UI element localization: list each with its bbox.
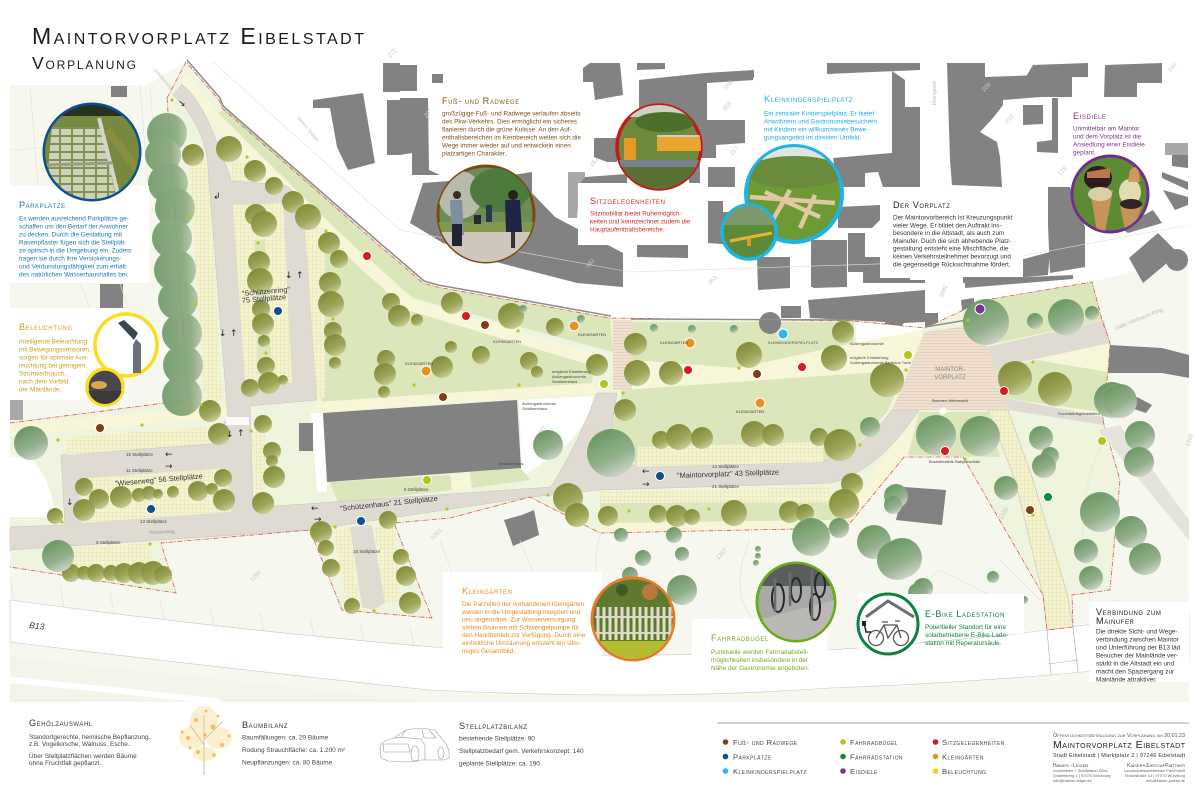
parcel numbers: 1290 [249, 569, 263, 583]
text block: stehen Brunnen mit Schwengelpumpe für [462, 624, 580, 631]
icon: bench photo [617, 105, 701, 192]
parking labels and arrows: ↑ [237, 429, 245, 439]
parking labels and arrows: → [642, 480, 650, 490]
parcel numbers: 356 [723, 80, 735, 91]
icon: ice cream photo [1072, 156, 1148, 235]
parcel numbers: 165 [1167, 62, 1179, 73]
heading: Kleingärten [462, 586, 512, 596]
parking labels and arrows: KLEINGÄRTEN [405, 361, 433, 366]
legend: Beleuchtung [942, 767, 986, 776]
text block: keinen Verkehrsteilnehmer bevorzugt und [893, 254, 1011, 260]
text block: Sitzmobiliar bietet Ruhemöglich- [590, 210, 682, 218]
text block: geplant. [1073, 150, 1096, 156]
heading: Mainufer [1096, 616, 1135, 626]
parking labels and arrows: 21 Stellplätze [712, 484, 740, 489]
parking labels and arrows: MAINTOR- [935, 367, 965, 373]
text block: Der Maintorvorbereich ist Kreuzungspunkt [893, 214, 1013, 222]
parcel numbers: 362 [585, 258, 597, 269]
text block: schaffen um den Bedarf der Anwohner [19, 224, 129, 230]
heading: Kleinkinderspielplatz [764, 94, 853, 104]
heading: Gehölzauswahl [29, 718, 93, 728]
parcel numbers: 1288 [1185, 432, 1196, 448]
parking labels and arrows: "Schützenring" [241, 285, 291, 298]
heading: Der Vorplatz [893, 200, 950, 210]
text block: flanieren durch die grüne Kulisse. An den Auf- [442, 126, 572, 134]
heading: Eisdiele [1073, 111, 1107, 121]
location dots [96, 252, 1106, 526]
text block: Mainlände attraktiver. [1096, 676, 1157, 684]
panel: Stellplatzbilanz [459, 721, 584, 768]
text block: Es werden ausreichend Parkplätze ge- [19, 216, 129, 222]
legend: Fahrradbügel [850, 738, 898, 747]
text block: solarbetriebene E-Bike-Lade- [925, 632, 1008, 639]
icon: car outline [380, 728, 449, 762]
text block: ze optisch in die Umgebung ein. Zudem [19, 248, 132, 254]
pink plaza [892, 323, 1008, 410]
text block: Stromverbrauch, [19, 370, 66, 378]
title block: Öffentlichkeitsbeteiligung zur Vorplanung am 20.01.23 [1053, 732, 1185, 739]
parking labels and arrows: 75 Stellplätze [241, 292, 286, 305]
legend: Kleingärten [942, 752, 984, 762]
parcel numbers: 210 [1004, 114, 1016, 125]
parking labels and arrows: KLEINGÄRTEN [736, 409, 764, 414]
text block: Anwohnern und Gastronomiebesuchern [764, 118, 877, 126]
parcel numbers: 1291 [430, 527, 444, 541]
parking labels and arrows: 13 Stellplätze [140, 519, 168, 524]
heading: Parkplätze [19, 200, 66, 210]
legend: Sitzgelegenheiten [942, 738, 1005, 747]
icon: e-bike charging [858, 594, 918, 654]
text block: neu angeordnet. Zur Wasserversorgung [462, 617, 576, 624]
road label B13: B13 [29, 620, 45, 632]
parcel numbers: 1287 [715, 547, 729, 561]
lawns [212, 108, 1108, 523]
building footprints [10, 63, 1189, 420]
heading: Fuß- und Radwege [442, 96, 520, 106]
text block: gestaltung entsteht eine Mischfläche, die [893, 246, 1009, 253]
text block: Potentieller Standort für eine [925, 624, 1006, 631]
parking labels and arrows: 14 Stellplätze [712, 464, 740, 469]
panel: Gehölzauswahl [29, 718, 151, 767]
text block: des natürlichen Wasserhaushaltes bei. [19, 272, 129, 278]
parking labels and arrows: 15 Stellplätze [353, 549, 381, 554]
parking labels and arrows: ↓ [219, 329, 227, 339]
heading: Stellplatzbilanz [459, 721, 528, 731]
icon: lamp at night photo [87, 369, 123, 405]
parcel numbers: Gebr.-Hofmann-Ring [1115, 307, 1164, 332]
parking labels and arrows: ← [165, 450, 173, 460]
parcel numbers: 209 [981, 82, 993, 93]
parcel numbers: Maingasse [932, 81, 938, 105]
text block: Wege immer wieder auf und entwickeln einen [442, 142, 571, 150]
text block: tragen sie durch ihre Versickerungs- [19, 256, 121, 262]
text block: Die Parzellen der vorhandenen Kleingärten [462, 601, 585, 608]
trees [14, 113, 1161, 614]
parking labels and arrows: ↓ [285, 271, 293, 281]
panel: Der Vorplatz [881, 188, 1023, 277]
icon: seesaw photo [722, 205, 776, 259]
white plots [10, 322, 923, 517]
text block: stärkt in die Altstadt ein und [1096, 660, 1175, 668]
text block: Neupflanzungen: ca. 80 Bäume [242, 760, 333, 766]
surrounding ground [10, 62, 1189, 702]
parking labels and arrows: Bushaltestelle Babyfahrräder [929, 459, 981, 464]
text block: Rodung Strauchfläche: ca. 1.200 m² [242, 747, 346, 754]
title: Maintorvorplatz Eibelstadt [32, 23, 364, 49]
parcel numbers: 297 [423, 108, 435, 119]
heading: Baumbilanz [242, 720, 288, 730]
parcel numbers: 272 [387, 48, 399, 59]
icon: bicycle stands photo [757, 563, 835, 641]
parcel numbers: Unterer Graben [296, 115, 320, 143]
parking labels and arrows: Außengastronomie [850, 341, 885, 346]
text block: Punktuelle werden Fahrradabstell- [711, 649, 808, 656]
parking labels and arrows: ↘ [178, 99, 186, 109]
parcel numbers: 1290/2 [534, 425, 548, 444]
title block: info@haines-leiger.de [1053, 778, 1093, 783]
text block: möglichkeiten insbesondere in der [711, 657, 809, 664]
text block: vieler Wege. Er bildet den Auftrakt ins- [893, 222, 1002, 229]
heading: Fahrradbügel [711, 633, 769, 643]
parcel numbers: Schützenring [152, 67, 174, 91]
small lamp markers [56, 98, 1035, 613]
text block: Hauptaufenthaltsbereiche. [590, 226, 665, 234]
parking labels and arrows: KLEINGÄRTEN [493, 339, 521, 344]
title block: Textorstraße 14 | 97070 Würzburg [1124, 773, 1185, 778]
icon: garden fence photo [590, 578, 676, 661]
title block: Haines - Leiger [1053, 763, 1088, 769]
parking labels and arrows: ← [311, 504, 319, 514]
title block: Maintorvorplatz Eibelstadt [1053, 739, 1186, 751]
icon: cyclists photo [436, 166, 536, 265]
parking labels and arrows: KLEINGÄRTEN [660, 340, 688, 345]
parking labels and arrows: Durchfahrtsgrünstreifen [1058, 411, 1100, 416]
parking labels and arrows: KLEINGÄRTEN [578, 332, 606, 337]
text block: enthaltsbereichen im Kernbereich weiten sich die [442, 134, 581, 142]
panel: Kleinkinderspielplatz [722, 78, 892, 259]
text block: Ansiedlung einer Eisdiele [1073, 142, 1145, 148]
parking labels and arrows: 11 Stellplätze [126, 468, 153, 473]
text block: Besucher der Mainlände ver- [1096, 652, 1178, 660]
B13 road band [10, 600, 1189, 695]
parking labels and arrows: → [314, 515, 322, 525]
icon: paving photo [44, 104, 140, 207]
text block: Die direkte Sicht- und Wege- [1096, 628, 1178, 636]
text block: leuchtung bei geringem [19, 362, 85, 370]
parking labels and arrows [66, 99, 1100, 554]
legend [723, 738, 1005, 776]
text block: Mainufer. Duch die sich abhebende Platz- [893, 238, 1011, 245]
text block: mit Kindern ein willkommenes Bewe- [764, 126, 868, 134]
parking labels and arrows: Außengastronomie [522, 401, 557, 406]
heading: Sitzgelegenheiten [590, 196, 666, 206]
title block: Stadt Eibelstadt | Marktplatz 2 | 97246 Eibelstadt [1053, 753, 1185, 759]
parking labels and arrows: Schützenhaus [522, 406, 547, 411]
panel: Fuß- und Radwege [430, 85, 590, 265]
title block: Grabenberg 1 | 97070 Würzburg [1053, 773, 1111, 778]
cream footpaths [10, 73, 1110, 533]
parking labels and arrows: Außengastronomie Bierhaus Turla [850, 360, 911, 365]
heading: Beleuchtung [19, 322, 73, 332]
bottom white strip [0, 702, 1199, 800]
legend: Kleinkinderspielplatz [733, 767, 807, 776]
text block: Nähe der Gastronomie angeboten. [711, 665, 810, 672]
text block: keiten und kennzeichnet zudem die [590, 218, 691, 226]
parking labels and arrows: mögliche Erweiterung [850, 355, 888, 360]
parcel numbers: 1285 [999, 506, 1011, 521]
text block: miges Gesamtbild. [462, 648, 515, 655]
legend: Fahrradstation [850, 752, 903, 762]
parking labels and arrows: Außengastronomie [552, 374, 587, 379]
text block: und dem Vorplatz ist die [1073, 134, 1142, 140]
parcel numbers: 357 [729, 146, 741, 157]
text block: zu decken. Durch die Gestaltung mit [19, 232, 122, 238]
text block: z.B. Vogelkirsche, Walnuss, Esche.. [29, 741, 132, 748]
heading: Verbindung zum [1096, 607, 1161, 617]
parking labels and arrows: mögliche Erweiterung [552, 369, 590, 374]
site area [10, 62, 1120, 630]
legend: Fuß- und Radwege [733, 738, 798, 747]
text block: der Mainlände. [19, 386, 62, 394]
title block [1053, 732, 1186, 783]
text block: geplante Stellplätze: ca. 190 [459, 760, 540, 768]
parking labels and arrows: ↑ [230, 329, 238, 339]
south footpath [988, 410, 1073, 630]
parking labels and arrows: ↓ [66, 498, 74, 508]
paved parking [65, 158, 831, 603]
title block: info@kaiser-juritza.de [1146, 778, 1186, 783]
text block: und Unterführung der B13 läd [1096, 644, 1181, 652]
parking labels and arrows: VORPLATZ [934, 375, 966, 381]
text block: Intelligente Beleuchtung [19, 338, 88, 346]
panel: Eisdiele [1070, 97, 1150, 234]
text block: Standortgerechte, heimische Bepflanzung. [29, 734, 151, 741]
text block: des Pkw-Verkehrs. Dies ermöglicht ein sicheres [442, 118, 577, 126]
parking labels and arrows: 15 Stellplätze [126, 452, 154, 457]
heading: E-Bike Ladestation [925, 609, 1005, 619]
parking labels and arrows: Brunnen-Wehrmarkt [932, 398, 969, 403]
site boundary [10, 62, 1120, 630]
parking labels and arrows: "Maintorvorplatz" 43 Stellplätze [677, 467, 779, 480]
text block: Über Stellplatzflächen werden Bäume [29, 752, 137, 760]
text block: und Verdunstungsfähigkeit zum erhalt [19, 264, 126, 270]
text block: besondere in die Altstadt, als auch zum [893, 230, 1004, 237]
text block: platzartigen Charakter. [442, 150, 507, 158]
parcel numbers: 263 [589, 157, 601, 168]
parking labels and arrows: "Wieserweg" 56 Stellplätze [114, 471, 203, 488]
parking labels and arrows: ← [642, 467, 650, 477]
text block: Unmittelbar am Maintor [1073, 126, 1140, 132]
panel: Verbindung zum Mainufer [1089, 602, 1189, 684]
panel: Baumbilanz [242, 720, 346, 766]
text block: großzügige Fuß- und Radwege verlaufen abseits [442, 110, 581, 118]
panel: Fahrradbügel [692, 563, 835, 675]
parking labels and arrows: "Schützenhaus" 21 Stellplätze [339, 494, 438, 513]
text block: die gegenseitige Rücksichtnahme fördert. [893, 261, 1011, 268]
parcel numbers: 355 [722, 101, 734, 112]
title block: Architekten + Stadtplaner BDA [1053, 768, 1108, 773]
title block: Landschaftsarchitekten PartGmbB [1124, 768, 1185, 773]
parking labels and arrows: KLEINKINDERSPIELPLATZ [768, 340, 819, 345]
panel: Parkplätze [10, 104, 149, 283]
parcel numbers: 178 [1057, 166, 1069, 177]
text block: Ein zentraler Kinderspielplatz. Er bietet [764, 110, 874, 118]
divider [717, 722, 1189, 724]
text block: Baumfällungen: ca. 20 Bäume [242, 734, 329, 742]
icon: street lamp photo [95, 314, 157, 376]
text block: mit Bewegungssensoren, [19, 346, 91, 354]
panel: E-Bike Ladestation [858, 594, 1024, 654]
parking labels and arrows: → [165, 462, 173, 472]
parking labels and arrows: ↓ [226, 430, 234, 440]
text block: verbindung zwischen Maintor [1096, 636, 1180, 644]
text block: werden in die Umgestaltung integriert und [461, 609, 581, 616]
text block: macht den Spaziergang zur [1096, 668, 1175, 676]
text block: station mit Reperatursäule. [925, 640, 1002, 647]
parcel numbers [149, 48, 1196, 583]
parking labels and arrows: Schützenhaus [552, 379, 577, 384]
text block: gungsangebot im direkten Umfeld. [764, 134, 862, 142]
legend: Eisdiele [850, 767, 878, 776]
icon: playground photo [745, 146, 845, 242]
text block: bestehende Stellplätze: 90 [459, 736, 535, 742]
text block: nach dem Vorbild [19, 378, 69, 386]
thin parcel lines [10, 62, 1189, 650]
panel: Beleuchtung [10, 308, 157, 405]
text block: Stellplatzbedarf gem. Verkehrskonzept: 140 [459, 748, 584, 755]
icon: autumn tree [179, 706, 232, 775]
road surfaces [10, 84, 919, 550]
parking labels and arrows: ↲ [213, 192, 221, 202]
text block: einheitliche Umzäunung entsteht ein stim- [462, 640, 581, 647]
text block: ohne Fruchtfall gepflanzt. [29, 760, 101, 767]
text block: den Handbetrieb zur Verfügung. Durch eine [462, 632, 586, 639]
panel: Sitzgelegenheiten [578, 105, 708, 245]
panel: Kleingärten [443, 572, 676, 661]
parking labels and arrows: 5 Stellplätze [404, 487, 429, 492]
parcel numbers: 3882 [939, 283, 950, 299]
parcel numbers: Wiesenweg [149, 529, 175, 536]
parcel numbers: 363 [707, 275, 719, 286]
subtitle: Vorplanung [32, 53, 136, 73]
parking labels and arrows: Schützenhaus [498, 461, 523, 466]
parking labels and arrows: ↑ [296, 271, 304, 281]
legend: Parkplätze [733, 752, 772, 762]
title block: Kaiser+Juritza+Partner [1127, 763, 1185, 769]
large building [323, 400, 521, 482]
text block: sorgen für optimale Aus- [19, 354, 88, 362]
parking labels and arrows: 9 Stellplätze [96, 540, 121, 545]
text block: Rasenpflaster fügen sich die Stellplät- [19, 240, 126, 246]
